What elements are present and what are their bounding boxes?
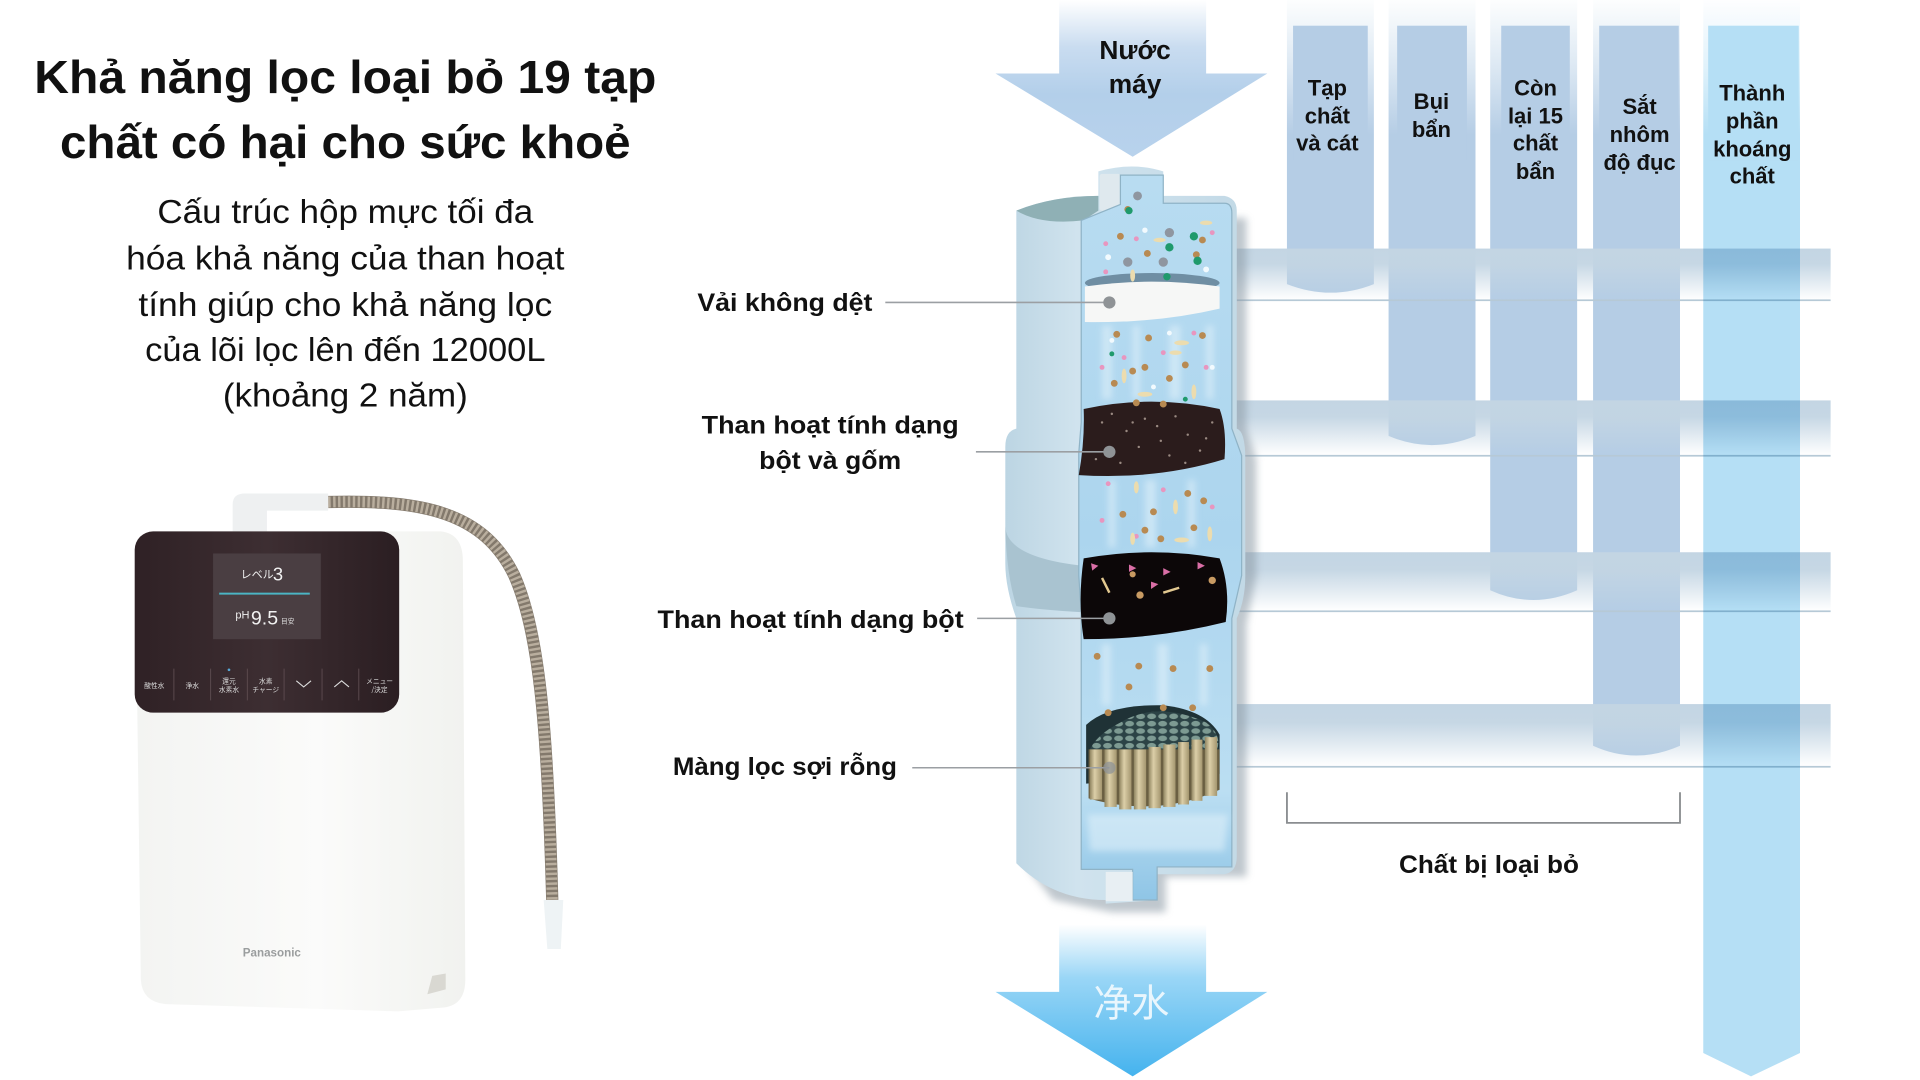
column labels: nhôm [1610,122,1670,147]
device brand: Panasonic [243,946,301,959]
cartridge interior [1079,175,1242,900]
label: activated carbon powder and ceramic [702,411,959,475]
column labels: độ đục [1603,150,1676,175]
top arrow: tap water [996,0,1267,157]
description paragraph: (khoảng 2 năm) [223,378,468,415]
column labels: Bụi [1414,89,1449,114]
column labels: chất [1513,131,1559,156]
top arrow: tap water: Nước [1099,35,1171,65]
device buttons: 浄水 [186,680,199,690]
title [34,51,656,168]
cartridge shell [1005,167,1245,904]
device body [137,531,465,1011]
column labels: Thành [1719,80,1785,105]
device screen: 3 [273,563,283,584]
bottom arrow: purified water: 净水 [1093,972,1169,1027]
column labels: lại 15 [1508,104,1563,129]
label: non-woven fabric: Vải không dệt [697,289,873,317]
column: dust [1389,0,1476,445]
cartridge neck cap [1100,174,1120,211]
column: remaining 15 contaminants [1490,0,1577,600]
layer: hollow fibre membrane [1086,705,1220,809]
column: iron aluminium turbidity [1593,0,1680,756]
device hose tip [544,900,563,949]
device buttons: メニュー [366,675,393,685]
description paragraph: tính giúp cho khả năng lọc [138,287,552,324]
device screen: レベル [241,569,274,581]
column labels: bẩn [1516,159,1555,184]
layer: non-woven fabric [1085,273,1220,322]
mineral column with arrow tip [1703,0,1800,1076]
device foot [427,973,446,994]
cartridge shadow [1029,218,1256,912]
column labels: và cát [1296,131,1359,156]
column: impurities and sand [1287,0,1374,293]
column labels: khoáng [1713,137,1791,162]
filter cartridge [1005,167,1256,912]
description paragraph [126,194,564,415]
column labels: chất [1730,164,1776,189]
column labels: Sắt [1622,94,1657,119]
column labels: bẩn [1412,117,1451,142]
cartridge bulge shading [1005,527,1082,612]
label: activated carbon powder and ceramic: bột và gốm [759,447,901,475]
column labels: Tạp [1308,76,1347,101]
device control panel [135,531,399,713]
device screen [213,553,321,639]
column labels: Còn [1514,76,1557,101]
bottom outlet [1106,872,1133,901]
device buttons: /決定 [372,684,388,694]
device buttons: 水素 [259,675,273,685]
column labels [1296,76,1791,189]
device buttons: チャージ [252,684,279,694]
description paragraph: hóa khả năng của than hoạt [126,240,564,277]
device screen: 目安 [281,617,295,625]
column labels: phần [1726,109,1779,134]
layer: powdered activated carbon [1081,552,1227,639]
contaminant particles [1094,192,1215,716]
label: powdered activated carbon: Than hoạt tính dạng bột [658,606,964,634]
device buttons: 水素水 [219,684,239,694]
water ionizer device [135,493,563,1011]
bottom arrow: purified water [996,924,1267,1076]
layer: activated carbon and ceramic [1079,402,1225,476]
device buttons [144,668,393,700]
device screen: pH [235,609,250,621]
horizontal filter bands [1237,249,1831,768]
device screen: 9.5 [251,607,278,629]
top arrow: tap water: máy [1109,69,1162,99]
bracket: removed substances [1287,792,1680,823]
cartridge rim [1016,196,1098,222]
device elbow connector [233,493,328,534]
label: activated carbon powder and ceramic: Than hoạt tính dạng [702,411,959,439]
title: Khả năng lọc loại bỏ 19 tạp [34,51,656,103]
title: chất có hại cho sức khoẻ [60,116,631,168]
device buttons: 還元 [222,675,236,685]
leader lines and dots [885,296,1116,774]
description paragraph: Cấu trúc hộp mực tối đa [157,194,534,231]
column labels: chất [1305,104,1351,129]
removed-substance columns [1287,0,1680,756]
device buttons: 酸性水 [144,680,165,690]
interior water streaks [1087,326,1228,851]
label: hollow fibre membrane: Màng lọc sợi rỗng [673,751,897,781]
bracket caption: Chất bị loại bỏ [1399,851,1579,879]
device hose [328,502,552,900]
description paragraph: của lõi lọc lên đến 12000L [145,332,546,369]
